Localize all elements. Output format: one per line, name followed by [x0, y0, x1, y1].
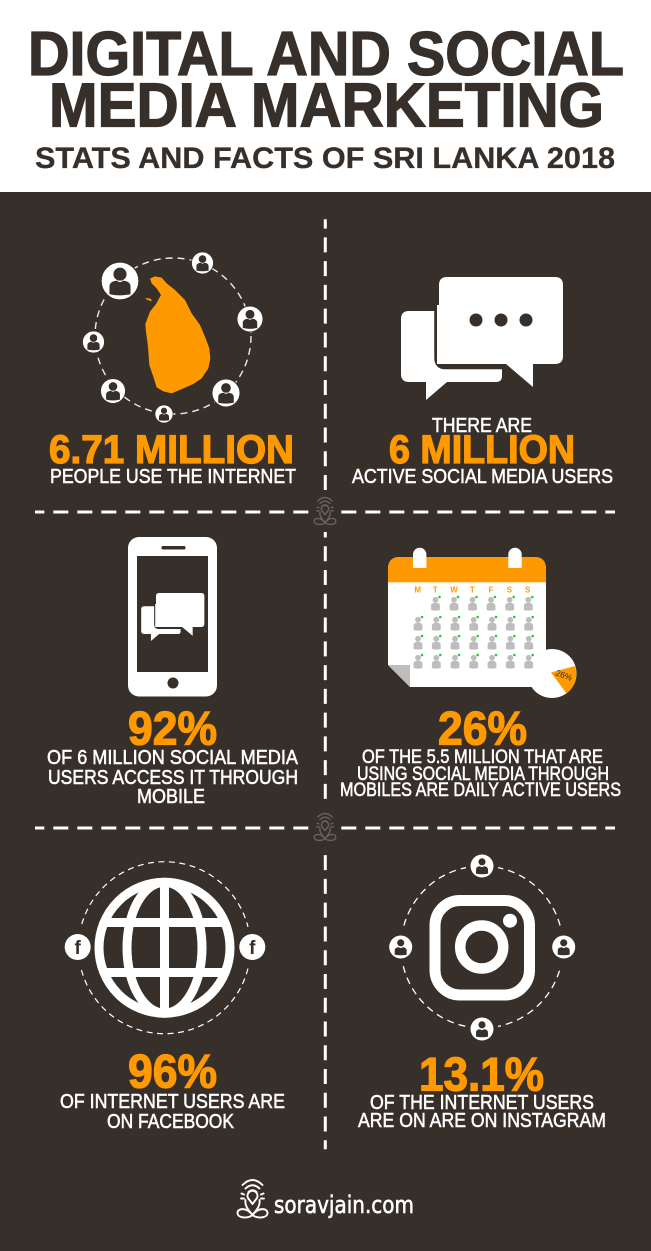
- caption: mobile access: USERS ACCESS IT THROUGH: [48, 766, 298, 789]
- caption: people use the internet: PEOPLE USE THE INTERNET: [50, 465, 296, 488]
- icon: globe with facebook badges: [65, 862, 265, 1034]
- icon: calendar with daily users: T: [433, 586, 438, 594]
- caption: mobile access: MOBILE: [137, 785, 205, 808]
- stat: 6 million: 6 MILLION: [389, 428, 575, 472]
- icon: globe with facebook badges: f: [249, 938, 256, 959]
- caption: instagram usage: ARE ON ARE ON INSTAGRAM: [358, 1109, 606, 1132]
- stat: 6.71 million: 6.71 MILLION: [49, 428, 294, 472]
- caption: daily active users: USING SOCIAL MEDIA THROUGH: [357, 764, 609, 785]
- icon: instagram with users: [385, 854, 580, 1040]
- subtitle: STATS AND FACTS OF SRI LANKA 2018: [35, 142, 615, 175]
- small logo mark 2: [314, 813, 336, 840]
- caption: facebook usage: [60, 1090, 285, 1133]
- stat: 13.1%: 13.1%: [419, 1048, 544, 1100]
- icon: calendar with daily users: F: [489, 586, 494, 594]
- caption: there are: THERE ARE: [432, 414, 532, 437]
- vertical divider: [324, 219, 327, 1149]
- icon: calendar with daily users: S: [525, 586, 531, 594]
- icon: calendar with daily users: [388, 548, 576, 698]
- icon: calendar with daily users: 26%: [554, 667, 574, 683]
- caption: instagram usage: OF THE INTERNET USERS: [370, 1091, 594, 1114]
- icon: Sri Lanka map with users: [82, 252, 263, 423]
- brand logo: [238, 1180, 414, 1219]
- stat: 96%: 96%: [128, 1044, 217, 1098]
- icon: calendar with daily users: T: [470, 586, 475, 594]
- icon: calendar with daily users: M: [414, 586, 421, 594]
- caption: active social media users: ACTIVE SOCIAL MEDIA USERS: [352, 465, 613, 488]
- icon: smartphone with chat: [128, 537, 217, 696]
- title: [28, 20, 624, 140]
- caption: daily active users: OF THE 5.5 MILLION THAT ARE: [362, 747, 603, 768]
- horizontal divider 2: [35, 826, 615, 830]
- icon: globe with facebook badges: f: [75, 938, 82, 959]
- caption: mobile access: OF 6 MILLION SOCIAL MEDIA: [47, 746, 298, 769]
- brand logo: soravjain.com: [274, 1191, 414, 1219]
- stat: 26%: 26%: [438, 702, 527, 754]
- caption: facebook usage: ON FACEBOOK: [107, 1110, 234, 1133]
- title: MEDIA MARKETING: [49, 72, 604, 140]
- horizontal divider 1: [35, 510, 615, 514]
- icon: calendar with daily users: W: [450, 586, 458, 594]
- caption: daily active users: [340, 747, 621, 801]
- caption: mobile access: [47, 746, 298, 808]
- caption: facebook usage: OF INTERNET USERS ARE: [60, 1090, 285, 1113]
- stat: 92%: 92%: [128, 702, 217, 754]
- icon: chat bubbles: [401, 277, 563, 400]
- caption: instagram usage: [358, 1091, 606, 1132]
- icon: calendar with daily users: S: [507, 586, 513, 594]
- small logo mark 1: [314, 497, 336, 524]
